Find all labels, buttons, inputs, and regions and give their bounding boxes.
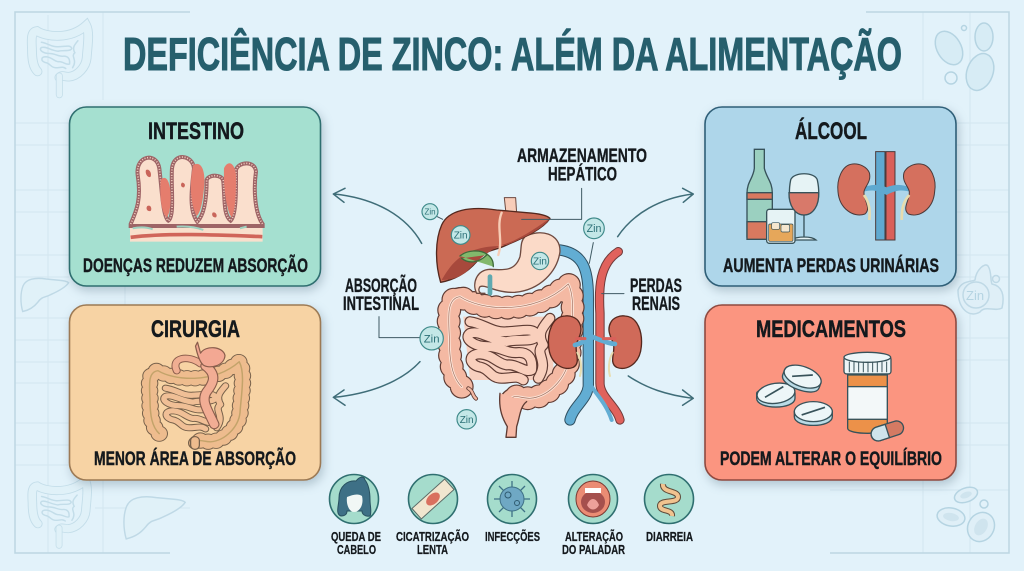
symptom: cicatrizacao lenta: CICATRIZAÇÃO [396,529,469,544]
panel: alcool [705,107,956,286]
label: absorcao intestinal: ABSORÇÃO [345,275,417,297]
background icon: zinc kidney right: Zin [966,288,984,303]
label: absorcao intestinal: INTESTINAL [343,294,419,315]
heading: intestino: INTESTINO [148,118,244,145]
illustration: pill bottle [844,352,905,443]
panel: intestino [70,107,320,286]
background icon: zinc kidney right [958,265,1003,314]
symptom: alteracao do paladar [562,474,625,557]
symptom: queda de cabelo: CABELO [337,542,376,557]
symptom: infeccoes [485,474,540,544]
symptom: alteracao do paladar: ALTERAÇÃO [565,529,623,544]
label: perdas renais [630,276,682,315]
heading: alcool: ÁLCOOL [795,117,867,145]
panel: cirurgia [70,305,320,480]
background icon: liver left [21,278,69,312]
background icon: liver bottom [124,497,185,539]
panel: medicamentos [705,305,956,480]
illustration: post-surgery gut [150,342,243,445]
arrows [333,188,693,405]
central anatomy illustration [333,188,693,437]
stomach [475,233,560,294]
kidneys [548,316,581,368]
central anatomy illustration: Zin [587,223,601,235]
label: perdas renais: RENAIS [632,294,680,315]
label: armazenamento hepatico: HEPÁTICO [548,164,617,186]
label: armazenamento hepatico [517,146,647,186]
symptom: queda de cabelo: QUEDA DE [331,529,381,544]
caption: intestino: DOENÇAS REDUZEM ABSORÇÃO [83,254,308,277]
background icon: blood cells bottom right [936,484,1000,546]
symptom: infeccoes: INFECÇÕES [485,529,540,544]
small intestine [468,318,550,380]
illustration: tablets [756,361,832,425]
label: armazenamento hepatico: ARMAZENAMENTO [517,146,647,167]
heading: cirurgia: CIRURGIA [151,316,240,343]
caption: medicamentos: PODEM ALTERAR O EQUILÍBRIO [720,447,942,470]
caption: alcool: AUMENTA PERDAS URINÁRIAS [723,254,939,277]
illustration: kidneys [838,152,935,240]
symptom: cicatrizacao lenta: LENTA [417,542,448,557]
callout lines [379,217,624,338]
central anatomy illustration: Zin [424,208,436,217]
central anatomy illustration: Zin [533,256,547,267]
central anatomy illustration: Zin [454,230,468,241]
heading: medicamentos: MEDICAMENTOS [756,316,906,343]
symptom: alteracao do paladar: DO PALADAR [562,542,625,557]
central anatomy illustration: Zin [424,333,440,345]
caption: cirurgia: MENOR ÁREA DE ABSORÇÃO [94,447,296,470]
gallbladder [460,251,493,267]
background icon: intestine top left [32,25,88,95]
zinc markers [420,204,604,429]
central anatomy illustration: Zin [460,415,474,426]
background icon: blood cells top right [930,23,999,94]
symptom: cicatrizacao lenta [396,474,469,557]
large intestine [449,284,573,437]
esophagus [504,198,517,213]
symptom: queda de cabelo [330,474,381,557]
liver [437,209,550,282]
label: perdas renais: PERDAS [630,276,682,297]
symptom: diarreia: DIARREIA [646,529,693,544]
illustration: alcoholic drinks [747,149,819,243]
background icon: intestine bottom left [32,481,87,546]
vein and artery [560,250,620,420]
label: absorcao intestinal [343,275,419,315]
symptom: diarreia [644,474,694,544]
illustration: intestinal villi [130,157,263,242]
